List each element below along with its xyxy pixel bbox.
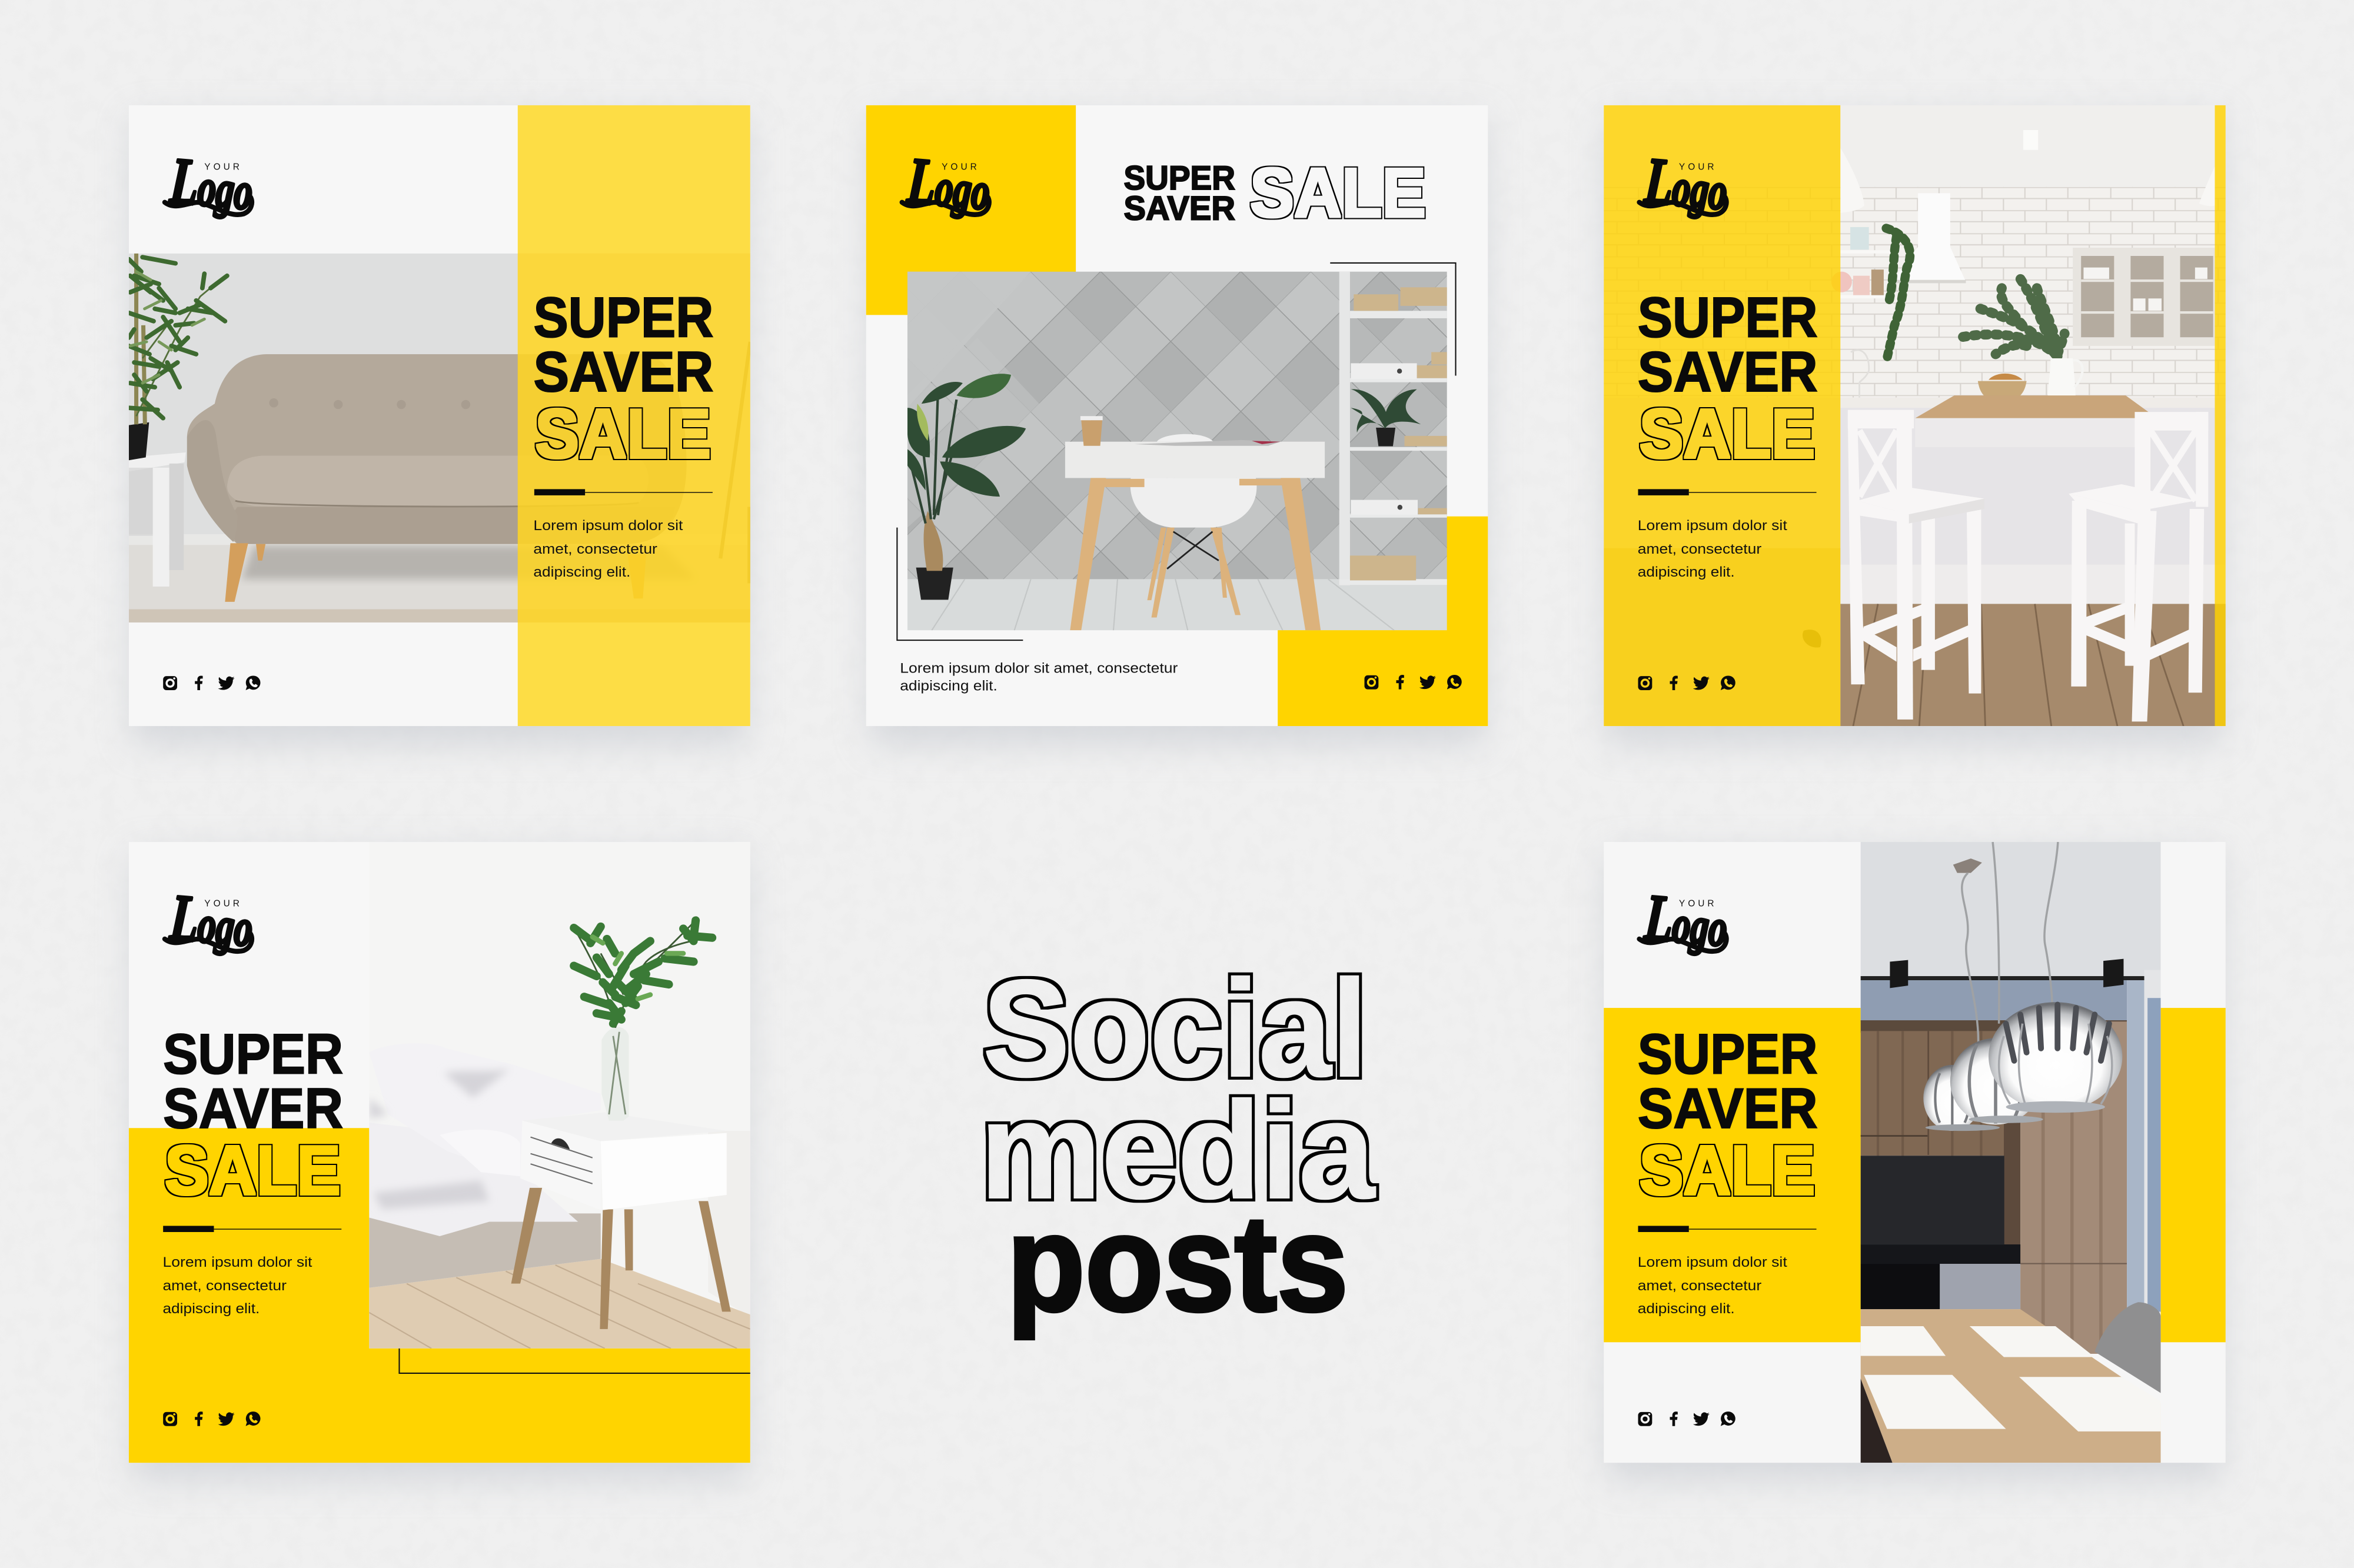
title: social media posts: media [980,1073,1376,1227]
logo: Logo [167,881,256,961]
body text: Lorem ipsum dolor sit [162,1254,312,1270]
panel: pendant lamp post [1604,842,2226,1463]
title: social media posts: posts [1007,1187,1348,1340]
yellow translucent column [518,105,750,726]
yellow band right [2161,1008,2226,1342]
social icons [163,1411,260,1426]
body text: adipiscing elit. [162,1301,260,1317]
panel: kitchen post [1604,105,2226,726]
heading: super saver sale: SAVER [1638,1076,1818,1140]
corner line top right [1330,263,1456,375]
title: social media posts: Social [983,951,1368,1106]
title: social media posts [980,951,1376,1340]
body text [1638,518,1787,580]
social icons [1638,675,1735,690]
photo: bed and side table [369,842,750,1349]
body text [162,1254,312,1317]
logo: YOUR [942,162,978,172]
body text: adipiscing elit. [1638,1301,1735,1317]
divider rule [1638,1226,1817,1232]
divider rule [1638,489,1817,495]
body text: Lorem ipsum dolor sit amet, consectetur [900,661,1178,677]
yellow edge strip [2215,105,2226,726]
logo: Logo [905,144,993,224]
social icons [163,675,260,690]
body text: amet, consectetur [162,1278,287,1294]
logo: YOUR [1679,162,1715,172]
yellow translucent column [1604,105,1840,726]
infographic canvas [120,105,2235,1492]
heading: super saver sale [533,285,713,473]
body text: adipiscing elit. [533,564,630,580]
corner line [399,1349,750,1373]
social icons [1364,675,1462,690]
body text: adipiscing elit. [900,678,998,694]
heading: super saver sale: SUPER [1638,285,1818,349]
panel: sofa post [129,105,750,726]
divider rule [163,1226,341,1232]
body text: amet, consectetur [1638,1278,1761,1294]
logo: YOUR [204,898,241,908]
photo: pendant lamps over dining table [1861,842,2161,1463]
body text: amet, consectetur [1638,541,1761,557]
body text: Lorem ipsum dolor sit [533,518,683,534]
photo: beige sofa and plant [129,254,750,622]
yellow block bottom right [1278,517,1488,726]
body text: adipiscing elit. [1638,564,1735,580]
photo: desk with diamond wall [907,272,1447,630]
heading: super saver sale: SALE [535,395,711,473]
logo: Logo [1642,881,1731,961]
heading: super saver sale: SALE [1640,395,1815,473]
heading: super saver sale: SUPER [1124,159,1235,197]
logo: YOUR [1679,898,1715,908]
heading: super saver sale: SAVER [1124,189,1235,227]
heading: super saver sale: SAVER [1638,339,1818,404]
logo: Logo [1642,144,1731,224]
heading: super saver sale: SUPER [533,285,713,349]
body text: amet, consectetur [533,541,657,557]
heading: super saver sale: SALE [1640,1131,1815,1210]
body text [900,661,1178,694]
divider rule [534,489,713,495]
heading: super saver sale [1124,154,1426,232]
heading: super saver sale [1638,1022,1818,1210]
heading: super saver sale: SAVER [163,1076,343,1140]
yellow block top left [866,105,1076,315]
heading: super saver sale [163,1022,343,1210]
logo: YOUR [204,162,241,172]
heading: super saver sale: SALE [1250,154,1426,232]
photo: white kitchen with bar stools [1604,105,2226,726]
body text [1638,1254,1787,1317]
heading: super saver sale: SAVER [533,339,713,404]
panel: bedroom post [129,842,750,1463]
yellow block bottom left [129,1128,750,1463]
logo: Logo [167,144,256,224]
body text [533,518,683,580]
corner line bottom left [897,528,1023,640]
heading: super saver sale [1638,285,1818,473]
heading: super saver sale: SUPER [163,1022,343,1086]
body text: Lorem ipsum dolor sit [1638,1254,1787,1270]
body text: Lorem ipsum dolor sit [1638,518,1787,534]
heading: super saver sale: SALE [165,1131,341,1210]
social icons [1638,1411,1735,1426]
yellow band left [1604,1008,1861,1342]
heading: super saver sale: SUPER [1638,1022,1818,1086]
panel: desk post [866,105,1488,726]
